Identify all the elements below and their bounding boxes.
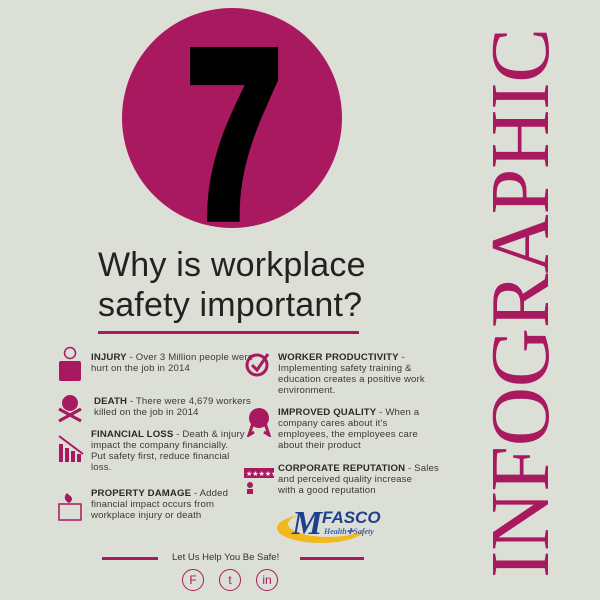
text: property damage: workplace injury or death bbox=[91, 510, 201, 521]
text: injury: hurt on the job in 2014 bbox=[91, 363, 190, 374]
text: Let Us Help You Be Safe! bbox=[172, 552, 279, 563]
text: reputation: and perceived quality increase bbox=[278, 474, 412, 485]
text: quality: IMPROVED QUALITY - When a bbox=[278, 407, 419, 418]
logo: MFASCO: M bbox=[291, 505, 324, 542]
text: financial loss: Put safety first, reduce financial bbox=[91, 451, 229, 462]
text: productivity: WORKER PRODUCTIVITY - bbox=[278, 352, 405, 363]
icon: property damage bbox=[58, 493, 82, 521]
icon: death bbox=[58, 395, 82, 422]
logo: MFASCO: Health✚Safety bbox=[323, 527, 374, 536]
circle with 7 bbox=[122, 8, 342, 228]
text: death bbox=[94, 396, 251, 418]
text: financial loss: impact the company financially. bbox=[91, 440, 228, 451]
social icons: F bbox=[189, 573, 197, 587]
title: safety important? bbox=[98, 286, 362, 324]
text: death: DEATH - There were 4,679 workers bbox=[94, 396, 251, 407]
text: property damage: PROPERTY DAMAGE - Added bbox=[91, 488, 228, 499]
text: reputation bbox=[278, 463, 439, 496]
icon: productivity bbox=[246, 353, 270, 376]
text: quality: about their product bbox=[278, 440, 361, 451]
icon: injury bbox=[59, 346, 81, 381]
text: property damage: financial impact occurs from bbox=[91, 499, 214, 510]
text: financial loss: loss. bbox=[91, 462, 111, 473]
text: reputation: CORPORATE REPUTATION - Sales bbox=[278, 463, 439, 474]
text: injury: INJURY - Over 3 Million people were bbox=[91, 352, 253, 363]
social icons bbox=[182, 569, 278, 591]
text: injury bbox=[91, 352, 253, 374]
text: quality: employees, the employees care bbox=[278, 429, 418, 440]
text: financial loss bbox=[91, 429, 245, 473]
text: reputation: with a good reputation bbox=[278, 485, 376, 496]
text: productivity: environment. bbox=[278, 385, 335, 396]
text: property damage bbox=[91, 488, 228, 521]
icon: reputation bbox=[244, 468, 274, 494]
social icons: in bbox=[262, 573, 272, 587]
icon: quality bbox=[246, 408, 272, 437]
icon: financial loss bbox=[58, 435, 84, 462]
text: productivity bbox=[278, 352, 425, 396]
footer bbox=[102, 557, 158, 560]
text: quality: company cares about it's bbox=[278, 418, 387, 429]
logo: MFASCO bbox=[277, 505, 381, 543]
text: death: killed on the job in 2014 bbox=[94, 407, 199, 418]
text: productivity: Implementing safety training & bbox=[278, 363, 412, 374]
title: Why is workplace bbox=[98, 246, 366, 284]
logo: MFASCO: FASCO bbox=[322, 508, 381, 527]
social icons: t bbox=[228, 573, 232, 587]
title bbox=[98, 246, 366, 324]
vertical INFOGRAPHIC: INFOGRAPHIC bbox=[474, 28, 567, 578]
text: financial loss: FINANCIAL LOSS - Death & injury bbox=[91, 429, 245, 440]
text: quality bbox=[278, 407, 420, 451]
text: productivity: education creates a positive work bbox=[278, 374, 425, 385]
